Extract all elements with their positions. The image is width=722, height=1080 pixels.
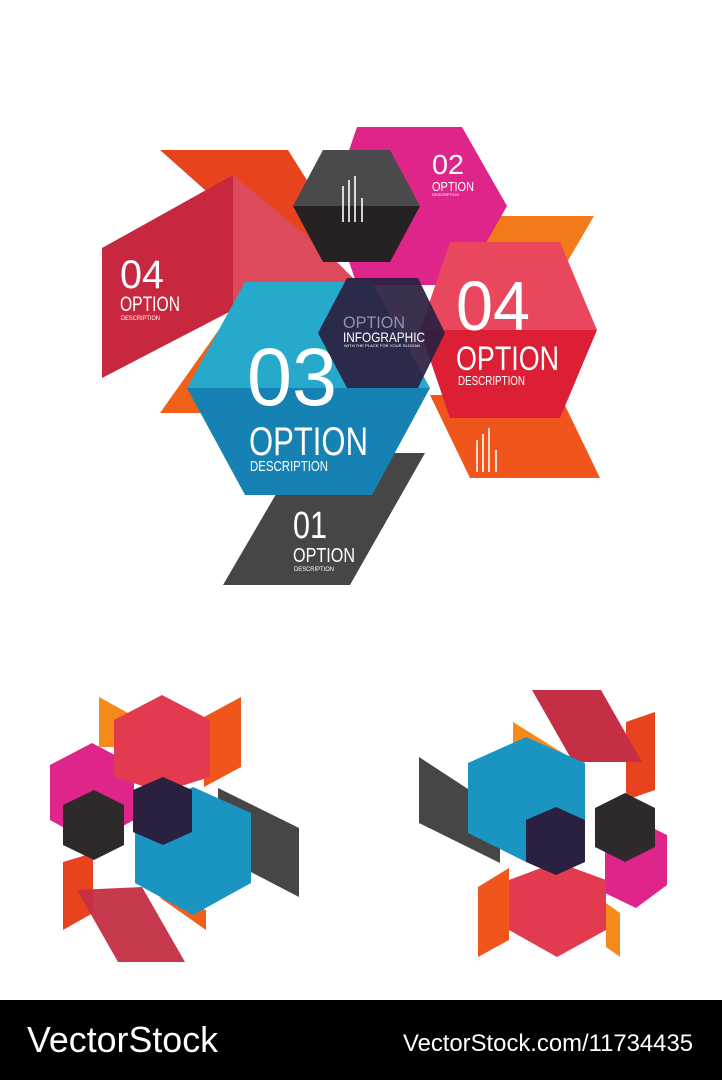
text: option left: OPTION [120,293,180,316]
text: 04 left: 04 [120,253,164,297]
text: logo: VectorStock [27,1019,219,1060]
text: description 03: DESCRIPTION [250,458,328,475]
icon: bars top [343,176,362,222]
shape: orange bottom-left behind blue [160,300,260,413]
panel: option 04 left [102,175,360,378]
icon: bars bottom [477,428,496,472]
panel: grey parallelogram option 01 [223,453,425,585]
text: 02: 02 [432,149,464,180]
panel: dark hexagon with bars [293,150,420,262]
text: 04 right: 04 [456,267,530,345]
decoration: right bottom cluster [419,690,667,957]
text: option center: OPTION [343,313,405,332]
text: url: VectorStock.com/11734435 [403,1030,693,1057]
shape: orange bottom-right band [430,395,600,478]
text: description right: DESCRIPTION [458,374,525,388]
shape: orange top-left band [160,150,335,262]
text: option 03: OPTION [249,420,368,464]
main infographic [102,127,600,585]
text: infographic: INFOGRAPHIC [343,329,425,345]
text: 01: 01 [293,505,327,547]
text: slogan: WITH THE PLACE FOR YOUR SLOGAN [344,344,421,348]
footer bar [0,1000,722,1080]
text: 03: 03 [247,332,337,423]
text: option 02: OPTION [432,179,474,194]
text: option right: OPTION [456,340,559,378]
text: description 02: DESCRIPTION [432,192,459,197]
text: option 01: OPTION [293,545,355,567]
shape: orange right band [470,216,594,300]
decoration: left bottom cluster [50,695,299,962]
text: description 01: DESCRIPTION [294,566,334,573]
panel: option 02 magenta hexagon [330,127,507,285]
panel: option 04 red hexagon [420,242,597,472]
text: description left: DESCRIPTION [121,315,160,322]
panel: option 03 blue hexagon [187,282,430,495]
panel: center purple hexagon [318,278,445,388]
